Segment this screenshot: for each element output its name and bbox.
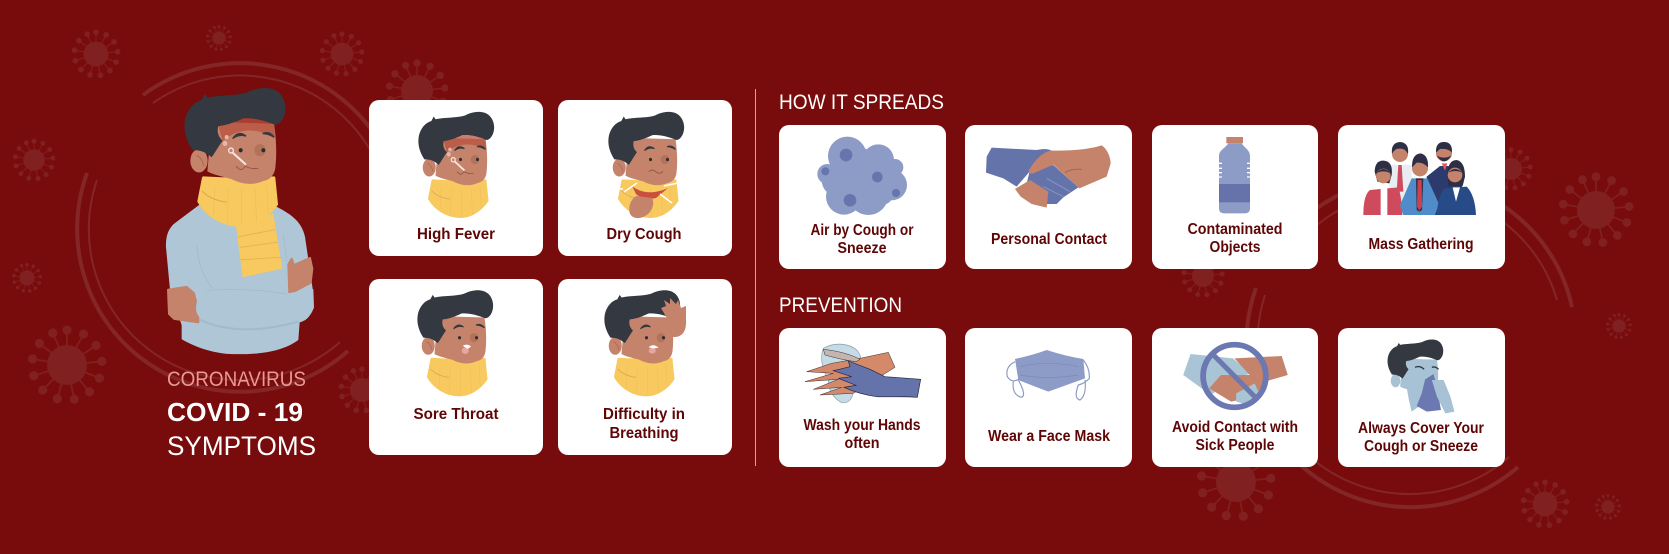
panel: avoid contact with sick people: Avoid Contact with	[1172, 419, 1298, 436]
panel: always cover your cough or sneeze: Always Cover Your	[1358, 420, 1484, 437]
panel: contaminated objects	[1152, 125, 1318, 269]
panel: contaminated objects: Objects	[1210, 239, 1261, 256]
title: coronavirus covid-19 symptoms: CORONAVIRUS	[167, 368, 306, 391]
panel: contaminated objects: Contaminated	[1188, 221, 1282, 238]
panel: wash your hands often	[779, 328, 946, 467]
panel: always cover your cough or sneeze: Cough or Sneeze	[1364, 438, 1478, 455]
divider	[755, 89, 756, 466]
panel: high fever: High Fever	[417, 226, 495, 243]
panel: dry cough: Dry Cough	[606, 226, 682, 243]
panel: avoid contact with sick people: Sick People	[1196, 437, 1275, 454]
panel: difficulty in breathing	[558, 279, 732, 455]
title: coronavirus covid-19 symptoms	[167, 368, 316, 461]
panel: sore throat: Sore Throat	[414, 406, 499, 423]
panel: air by cough or sneeze: Sneeze	[838, 240, 887, 257]
panel: sore throat	[369, 279, 543, 455]
panel: dry cough	[558, 100, 732, 256]
panel: difficulty in breathing: Breathing	[610, 425, 678, 442]
panel: air by cough or sneeze: Air by Cough or	[810, 222, 914, 239]
title: coronavirus covid-19 symptoms: COVID - 19	[167, 397, 303, 427]
panel: air by cough or sneeze	[779, 125, 946, 269]
panel: difficulty in breathing: Difficulty in	[603, 406, 685, 423]
panel: wash your hands often: Wash your Hands	[804, 417, 921, 434]
panel: avoid contact with sick people	[1152, 328, 1318, 467]
panel: wear a face mask: Wear a Face Mask	[988, 428, 1110, 445]
panel: always cover your cough or sneeze	[1338, 328, 1505, 467]
panel: wear a face mask	[965, 328, 1132, 467]
illustration: man with fever	[166, 88, 314, 354]
panel: high fever	[369, 100, 543, 256]
heading: prevention: PREVENTION	[779, 294, 902, 317]
heading: how it spreads: HOW IT SPREADS	[779, 91, 944, 114]
panel: mass gathering: Mass Gathering	[1368, 236, 1474, 253]
title: coronavirus covid-19 symptoms: SYMPTOMS	[167, 431, 316, 461]
panel: personal contact: Personal Contact	[991, 231, 1108, 248]
panel: mass gathering	[1338, 125, 1505, 269]
panel: wash your hands often: often	[844, 435, 880, 452]
background rings	[77, 63, 1572, 507]
panel: personal contact	[965, 125, 1132, 269]
